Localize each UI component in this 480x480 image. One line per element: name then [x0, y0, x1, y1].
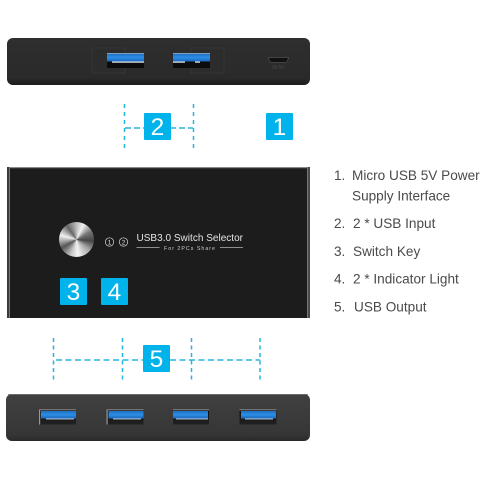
- usb output port 2: [106, 410, 144, 424]
- indicator lights: 2: [122, 240, 126, 246]
- item 2: 2.: [334, 216, 345, 231]
- badge 3: 3: [67, 279, 80, 306]
- item 1: Supply Interface: [352, 188, 450, 204]
- badge 5: [143, 345, 170, 373]
- item 1: 1.: [334, 168, 345, 183]
- badge 3: [60, 278, 87, 306]
- usb output port 1: [39, 410, 76, 424]
- item 1: Micro USB 5V Power: [352, 168, 480, 183]
- feature list: [334, 168, 480, 314]
- usb output port 3: [173, 410, 209, 424]
- badge 5: 5: [150, 346, 163, 373]
- product label: USB3.0 Switch Selector: [136, 233, 244, 244]
- indicator lights: 1: [108, 240, 112, 246]
- device: output side view: [6, 394, 310, 441]
- item 4: 2 * Indicator Light: [353, 272, 459, 286]
- item 3: Switch Key: [353, 244, 420, 259]
- micro usb port: [268, 58, 288, 71]
- device: input side view: [7, 38, 310, 85]
- usb input port 1: [92, 48, 144, 73]
- indicator lights: [105, 238, 128, 246]
- item 1: [334, 168, 480, 204]
- badge 1: 1: [273, 114, 286, 141]
- badge 1: [266, 113, 293, 141]
- badge 2: 2: [151, 114, 164, 141]
- item 2: 2 * USB Input: [353, 216, 436, 231]
- item 5: 5.: [334, 300, 345, 314]
- item 3: 3.: [334, 244, 345, 259]
- switch key knob: [58, 221, 94, 257]
- badge 4: [101, 278, 128, 306]
- badge 4: 4: [108, 279, 121, 306]
- usb input port 2: [173, 48, 224, 73]
- item 5: USB Output: [354, 300, 427, 314]
- badge 2: [144, 113, 171, 141]
- device: top panel: [7, 167, 310, 318]
- product label: [136, 233, 244, 252]
- usb output port 4: [240, 410, 276, 424]
- bracket: input ports: [124, 104, 194, 152]
- bracket: output ports: [54, 338, 260, 380]
- micro usb port: IN 5V: [272, 65, 285, 71]
- item 4: 4.: [334, 272, 345, 286]
- product label: For 2PCs Share: [164, 246, 215, 252]
